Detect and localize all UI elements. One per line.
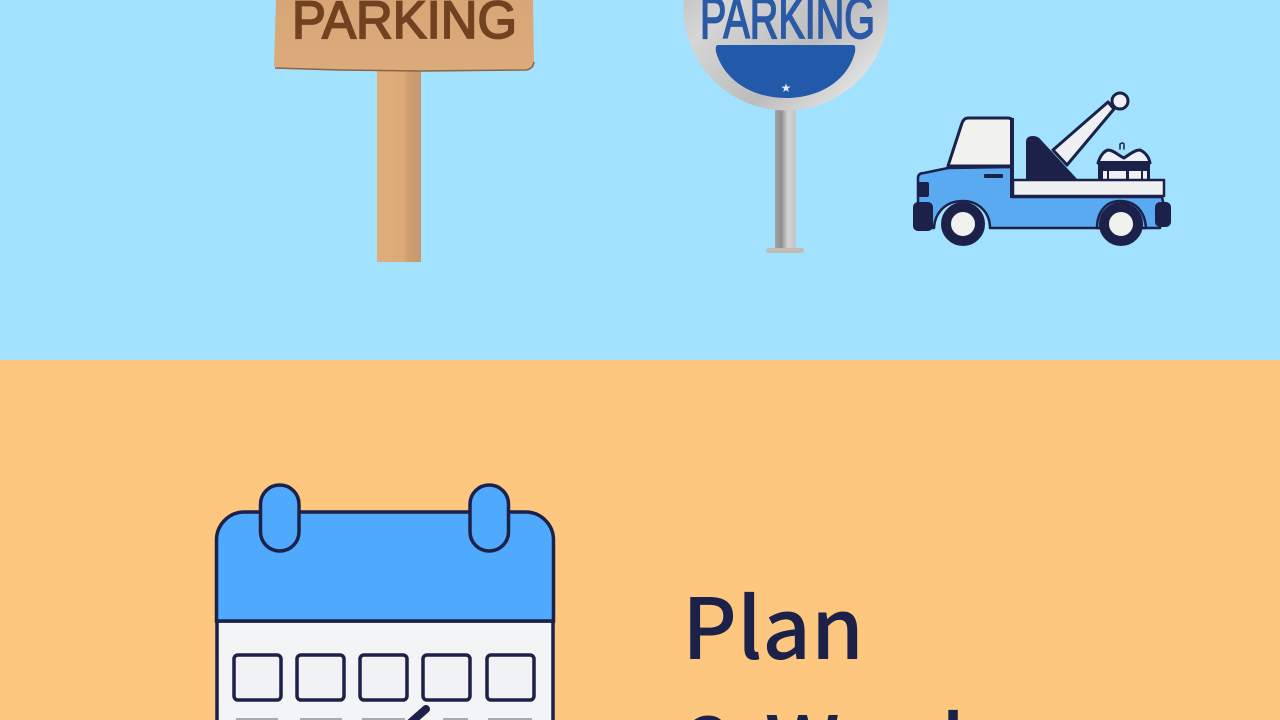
headlight <box>918 182 929 197</box>
metal parking sign <box>684 0 888 253</box>
icon: calendar <box>216 485 554 720</box>
calendar page <box>217 621 553 720</box>
rear wheel arch <box>1097 201 1146 228</box>
rear bumper <box>1155 202 1171 227</box>
pole base <box>766 248 804 253</box>
right binding ring <box>470 485 508 551</box>
star: ★ <box>781 81 791 95</box>
truck body <box>918 167 1164 228</box>
crane arm <box>1053 102 1114 165</box>
date cells row 1 <box>234 655 534 700</box>
metal pole <box>775 108 796 249</box>
front wheel <box>946 207 980 241</box>
date cells row 2 <box>236 718 532 720</box>
check mark <box>409 709 426 720</box>
load on bed <box>1098 143 1150 180</box>
left binding ring <box>260 485 299 551</box>
front bumper <box>913 202 933 231</box>
heading line 1: Plan <box>682 563 864 684</box>
wooden post <box>377 70 421 262</box>
icon: tow truck <box>913 93 1171 241</box>
heading: plan 2 weeks <box>682 563 1034 720</box>
blue lower panel <box>716 45 855 98</box>
top panel background <box>0 0 1280 360</box>
rear wheel <box>1104 207 1138 241</box>
bottom panel background <box>0 360 1280 720</box>
crane base <box>1026 136 1078 180</box>
cab rear edge <box>1010 118 1014 198</box>
cab window <box>948 118 1012 166</box>
truck bed <box>1013 180 1164 196</box>
board lower edge <box>275 62 534 71</box>
calendar header <box>216 512 554 621</box>
door handle <box>984 174 1003 178</box>
wooden board <box>274 0 534 71</box>
hook pulley <box>1112 93 1128 109</box>
round metal plate <box>684 0 888 110</box>
wooden parking sign <box>274 0 534 262</box>
